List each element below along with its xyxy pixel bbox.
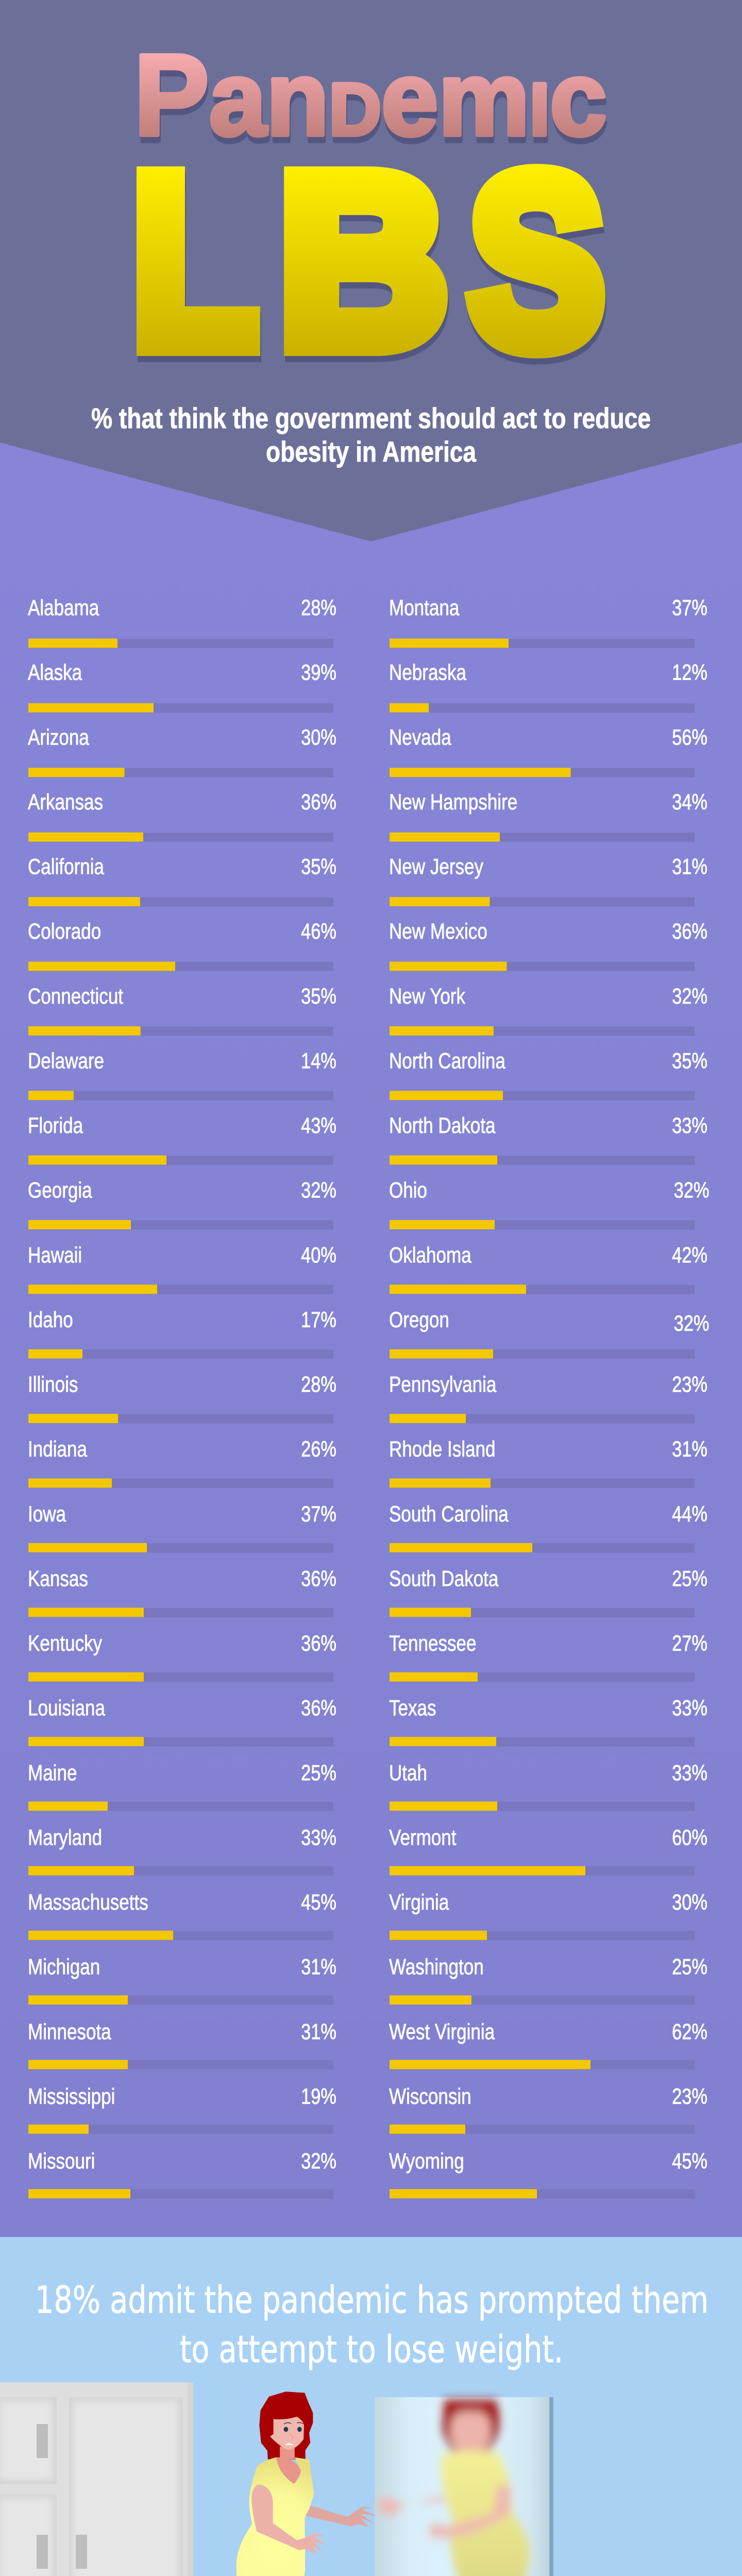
row: Utah: Utah — [389, 1760, 427, 1785]
row: West Virginia: 62% — [672, 2020, 707, 2044]
row: Indiana — [28, 1437, 336, 1488]
row: Tennessee: 27% — [672, 1631, 707, 1656]
row: West Virginia: West Virginia — [389, 2019, 495, 2044]
row: Mississippi: 19% — [301, 2084, 336, 2109]
row: Washington: Washington — [389, 1955, 484, 1979]
row: Iowa: 37% — [301, 1502, 336, 1527]
row: Texas: 33% — [672, 1696, 707, 1721]
row: Mississippi: Mississippi — [28, 2084, 115, 2109]
row: Virginia: 30% — [672, 1890, 707, 1914]
row: Nevada: Nevada — [389, 725, 451, 750]
row: Pennsylvania — [389, 1372, 707, 1423]
row: Nevada — [389, 725, 707, 777]
row: Maryland — [28, 1825, 336, 1876]
row: Alaska — [28, 660, 336, 713]
row: Oklahoma: Oklahoma — [389, 1243, 471, 1267]
row: Iowa — [28, 1501, 336, 1553]
row: Ohio — [389, 1178, 709, 1230]
row: Minnesota — [28, 2019, 336, 2070]
row: Maine — [28, 1760, 336, 1811]
row: North Carolina: 35% — [672, 1049, 707, 1073]
row: Vermont: 60% — [672, 1825, 707, 1850]
row: Arkansas: 36% — [301, 790, 336, 815]
row: Utah — [389, 1760, 707, 1811]
row: Minnesota: 31% — [301, 2020, 336, 2044]
text: 18% admit: to attempt to lose weight. — [180, 2328, 563, 2371]
row: Kansas: Kansas — [28, 1566, 88, 1591]
row: North Carolina: North Carolina — [389, 1048, 505, 1073]
row: Massachusetts: Massachusetts — [28, 1890, 148, 1914]
illustration: white cabinet — [0, 2382, 193, 2576]
row: Nebraska: 12% — [672, 660, 707, 685]
row: Texas: Texas — [389, 1696, 436, 1720]
row: Colorado: Colorado — [28, 919, 101, 944]
row: New Mexico: New Mexico — [389, 919, 487, 944]
row: Wyoming: Wyoming — [389, 2149, 464, 2174]
row: Oregon — [389, 1308, 709, 1359]
text: 18% admit — [35, 2278, 709, 2371]
row: South Carolina: South Carolina — [389, 1501, 509, 1527]
subtitle: obesity in America — [266, 435, 477, 468]
row: Oregon: Oregon — [389, 1308, 449, 1332]
row: Wisconsin: 23% — [672, 2084, 707, 2109]
chart: state bars, right column — [389, 596, 709, 2199]
row: Connecticut: Connecticut — [28, 984, 123, 1009]
row: New Hampshire: New Hampshire — [389, 790, 517, 815]
row: Connecticut: 35% — [301, 984, 336, 1009]
row: New Jersey: New Jersey — [389, 854, 483, 879]
row: Massachusetts — [28, 1890, 336, 1940]
row: Massachusetts: 45% — [301, 1890, 336, 1914]
row: Wisconsin: Wisconsin — [389, 2084, 471, 2109]
row: Delaware — [28, 1048, 336, 1100]
row: Alabama: 28% — [301, 596, 336, 620]
row: South Carolina — [389, 1501, 707, 1553]
row: North Carolina — [389, 1048, 707, 1100]
row: Tennessee: Tennessee — [389, 1631, 476, 1656]
row: Arizona: 30% — [301, 725, 336, 750]
row: Delaware: 14% — [301, 1049, 336, 1073]
row: Wyoming — [389, 2149, 707, 2199]
row: Nebraska — [389, 660, 707, 713]
row: Nebraska: Nebraska — [389, 660, 466, 685]
row: Michigan: 31% — [301, 1955, 336, 1979]
row: Vermont — [389, 1825, 707, 1876]
row: West Virginia — [389, 2019, 707, 2070]
row: New Jersey: 31% — [672, 855, 707, 879]
row: Montana: 37% — [672, 596, 707, 620]
subtitle — [91, 402, 651, 468]
row: Louisiana: Louisiana — [28, 1696, 105, 1720]
row: Pennsylvania: 23% — [672, 1372, 707, 1397]
row: Virginia — [389, 1890, 707, 1940]
row: South Dakota: 25% — [672, 1567, 707, 1591]
row: Rhode Island: 31% — [672, 1437, 707, 1462]
row: Missouri: 32% — [301, 2149, 336, 2174]
row: California — [28, 854, 336, 907]
panel: blue room — [0, 2237, 742, 2576]
row: Illinois — [28, 1372, 336, 1423]
row: Montana — [389, 596, 707, 648]
row: Alabama: Alabama — [28, 596, 99, 620]
chart: state bars, left column — [28, 596, 336, 2199]
row: Maryland: Maryland — [28, 1825, 102, 1850]
title: LBS: S — [469, 125, 604, 396]
row: Arizona — [28, 725, 336, 777]
row: Hawaii — [28, 1243, 336, 1294]
row: New Hampshire — [389, 790, 707, 842]
row: Kansas: 36% — [301, 1567, 336, 1591]
row: Utah: 33% — [672, 1761, 707, 1785]
row: Texas — [389, 1696, 707, 1747]
row: Hawaii: 40% — [301, 1243, 336, 1267]
row: Ohio: 32% — [674, 1178, 709, 1203]
row: New York — [389, 984, 707, 1036]
row: Connecticut — [28, 984, 336, 1036]
row: Tennessee — [389, 1631, 707, 1682]
row: Georgia: 32% — [301, 1178, 336, 1203]
row: Missouri: Missouri — [28, 2149, 95, 2174]
illustration: mirror with blurred reflection — [375, 2397, 553, 2576]
row: Mississippi — [28, 2084, 336, 2134]
row: Oklahoma — [389, 1243, 707, 1294]
row: Alaska: 39% — [301, 660, 336, 685]
row: Arkansas: Arkansas — [28, 790, 103, 815]
illustration: red-haired woman — [235, 2392, 377, 2576]
title: LBS: B — [279, 125, 448, 396]
row: Illinois: 28% — [301, 1372, 336, 1397]
row: Wisconsin — [389, 2084, 707, 2134]
row: New Mexico — [389, 919, 707, 971]
row: South Dakota — [389, 1566, 707, 1617]
row: Delaware: Delaware — [28, 1048, 104, 1073]
row: Alabama — [28, 596, 336, 648]
title: Pandemic: Pandemic — [134, 30, 607, 160]
row: Arkansas — [28, 790, 336, 842]
row: Illinois: Illinois — [28, 1372, 78, 1397]
row: Indiana: 26% — [301, 1437, 336, 1462]
row: Idaho — [28, 1308, 336, 1359]
panel: header background — [0, 0, 742, 546]
row: New Hampshire: 34% — [672, 790, 707, 815]
row: South Carolina: 44% — [672, 1502, 707, 1527]
row: New Mexico: 36% — [672, 920, 707, 944]
row: Florida — [28, 1113, 336, 1165]
row: California: 35% — [301, 855, 336, 879]
row: Maryland: 33% — [301, 1825, 336, 1850]
row: Indiana: Indiana — [28, 1437, 87, 1462]
row: Missouri — [28, 2149, 336, 2199]
row: Alaska: Alaska — [28, 660, 82, 685]
row: Virginia: Virginia — [389, 1890, 449, 1914]
row: Colorado — [28, 919, 336, 971]
row: Oregon: 32% — [674, 1311, 709, 1336]
row: South Dakota: South Dakota — [389, 1566, 498, 1591]
row: North Dakota: 33% — [672, 1113, 707, 1138]
row: Vermont: Vermont — [389, 1825, 457, 1850]
row: New Jersey — [389, 854, 707, 907]
row: Arizona: Arizona — [28, 725, 89, 750]
row: Rhode Island: Rhode Island — [389, 1437, 495, 1462]
row: Louisiana — [28, 1696, 336, 1747]
row: Pennsylvania: Pennsylvania — [389, 1372, 497, 1397]
row: Kentucky: Kentucky — [28, 1631, 102, 1656]
row: Oklahoma: 42% — [672, 1243, 707, 1267]
row: Florida: Florida — [28, 1113, 83, 1138]
row: Maine: 25% — [301, 1761, 336, 1785]
row: Idaho: 17% — [301, 1308, 336, 1332]
title: LBS — [132, 125, 604, 397]
row: Kentucky: 36% — [301, 1631, 336, 1656]
row: North Dakota: North Dakota — [389, 1113, 496, 1138]
row: Idaho: Idaho — [28, 1308, 73, 1332]
row: Georgia: Georgia — [28, 1178, 92, 1202]
row: Minnesota: Minnesota — [28, 2019, 111, 2044]
row: Georgia — [28, 1178, 336, 1230]
row: New York: New York — [389, 984, 465, 1009]
row: Nevada: 56% — [672, 725, 707, 750]
row: Kentucky — [28, 1631, 336, 1682]
row: Louisiana: 36% — [301, 1696, 336, 1721]
row: Michigan — [28, 1955, 336, 2005]
row: California: California — [28, 854, 104, 879]
row: Michigan: Michigan — [28, 1955, 100, 1979]
row: Kansas — [28, 1566, 336, 1617]
row: Maine: Maine — [28, 1760, 77, 1785]
row: Rhode Island — [389, 1437, 707, 1488]
row: Wyoming: 45% — [672, 2149, 707, 2174]
row: Washington — [389, 1955, 707, 2005]
row: New York: 32% — [672, 984, 707, 1009]
row: Florida: 43% — [301, 1113, 336, 1138]
row: Hawaii: Hawaii — [28, 1243, 82, 1267]
row: Colorado: 46% — [301, 920, 336, 944]
row: Ohio: Ohio — [389, 1178, 427, 1202]
row: Montana: Montana — [389, 596, 460, 620]
panel: purple state chart background with chevron — [0, 443, 742, 2237]
row: Washington: 25% — [672, 1955, 707, 1979]
row: Iowa: Iowa — [28, 1501, 66, 1527]
row: North Dakota — [389, 1113, 707, 1165]
title: LBS: L — [132, 125, 257, 397]
